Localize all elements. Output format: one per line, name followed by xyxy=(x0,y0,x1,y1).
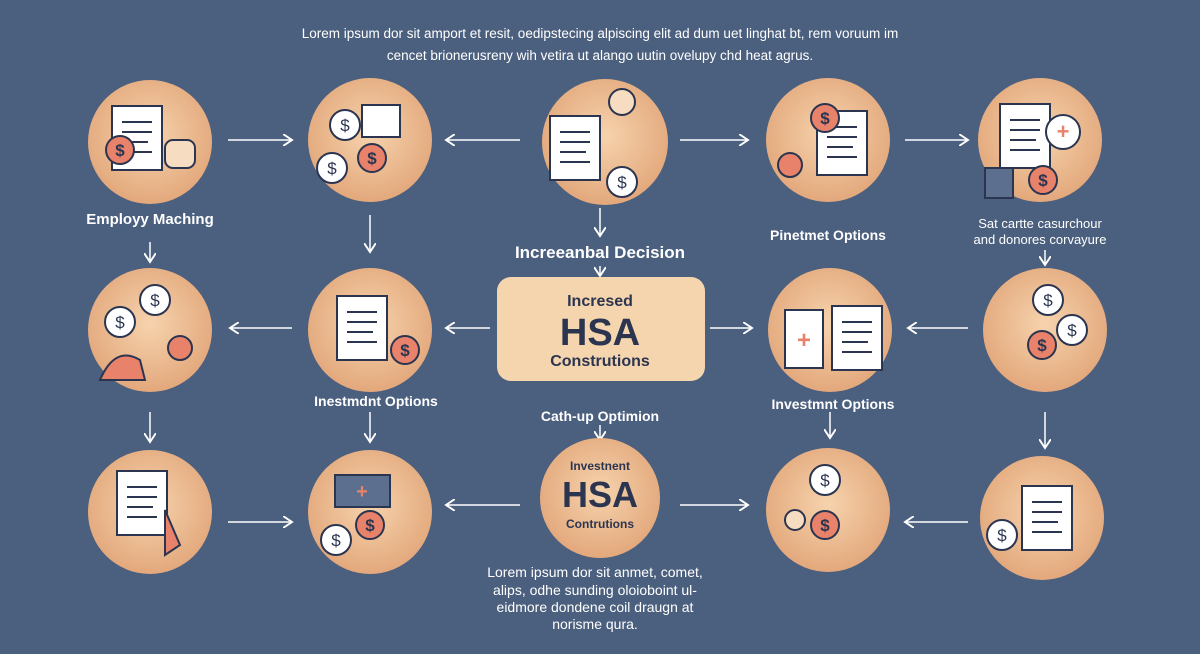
bottom text block: eidmore dondene coil draugn at xyxy=(497,599,694,615)
center box xyxy=(497,277,705,381)
circle: row3 col1 xyxy=(88,450,212,574)
circle: row3 center hsa: Investnent xyxy=(570,459,630,473)
circle: row2 col4 xyxy=(768,268,892,392)
circle: row1 col4 xyxy=(766,78,890,202)
circle: row2 col4: + xyxy=(797,327,811,354)
circle: row2 col1 xyxy=(88,268,212,392)
circle: row1 col5: + xyxy=(1057,119,1069,144)
circle: row3 center hsa: HSA xyxy=(562,474,638,515)
arrows xyxy=(150,140,1045,522)
circle: row3 center hsa xyxy=(540,438,660,558)
circle: row3 center hsa: Contrutions xyxy=(566,517,634,531)
label: row1 col5 xyxy=(974,216,1106,247)
bottom text block: norisme qura. xyxy=(552,616,638,632)
bottom text block xyxy=(487,564,703,632)
label: row1 col5: Sat cartte casurchour xyxy=(978,216,1102,231)
center box: Incresed xyxy=(567,293,633,310)
label: row1 col5: and donores corvayure xyxy=(974,232,1106,247)
bottom text block: alips, odhe sunding oloioboint ul- xyxy=(493,582,697,598)
circle: row1 col5 xyxy=(978,78,1102,202)
circle: row3 col5 xyxy=(980,456,1104,580)
circle: employer matching xyxy=(88,80,212,204)
label: increeanbal decision: Increeanbal Decision xyxy=(515,243,685,262)
top text block: cencet brionerusreny wih vetira ut alango uutin ovelupy chd heat agrus. xyxy=(387,48,813,63)
center box: Construtions xyxy=(550,353,650,370)
circle: row3 col2 xyxy=(308,450,432,574)
bottom text block: Lorem ipsum dor sit anmet, comet, xyxy=(487,564,703,580)
top text block xyxy=(302,26,898,63)
top text block: Lorem ipsum dor sit amport et resit, oedipstecing alpiscing elit ad dum uet linghat bt, rem voruum im xyxy=(302,26,898,41)
circle: row3 col2: + xyxy=(356,481,368,503)
label: investmnt options: Investmnt Options xyxy=(772,396,895,412)
label: employy maching: Employy Maching xyxy=(86,211,214,228)
label: pinetmet options: Pinetmet Options xyxy=(770,227,886,243)
label: inestmdnt options: Inestmdnt Options xyxy=(314,393,438,409)
circle: row2 col5 xyxy=(983,268,1107,392)
circle: row1 center xyxy=(542,79,668,205)
label: cath-up optimion: Cath-up Optimion xyxy=(541,408,659,424)
center box: HSA xyxy=(560,312,640,354)
circle: row3 col4 xyxy=(766,448,890,572)
circle: row2 col2 xyxy=(308,268,432,392)
circle: row1 col2 xyxy=(308,78,432,202)
